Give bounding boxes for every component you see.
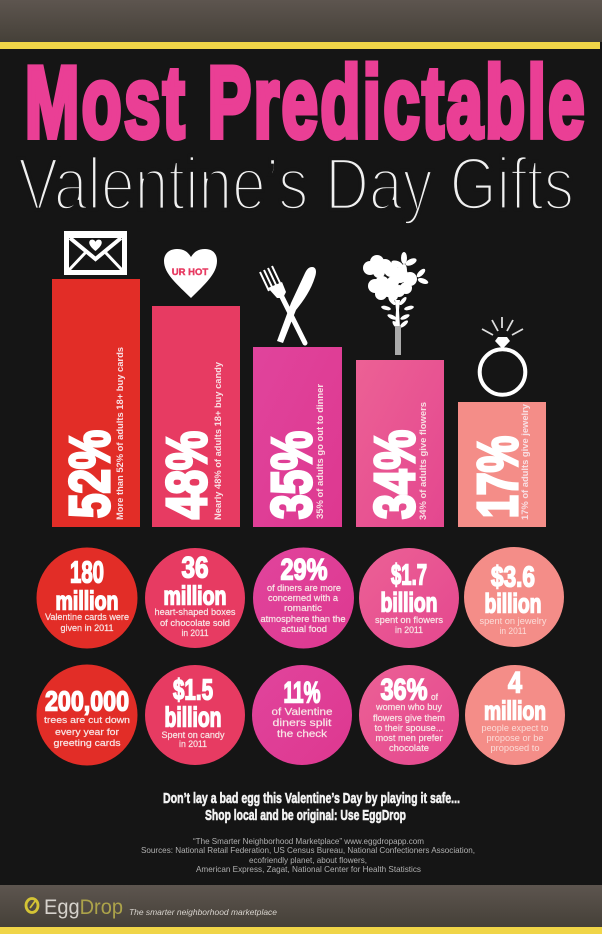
circle: 36 million: 36: [182, 552, 208, 584]
circle: 29% of diners: actual food: [281, 624, 327, 634]
call to action text: Don’t lay a bad egg this Valentine’s Day by playing it safe...: [163, 790, 460, 807]
circle: $3.6 billion: [464, 547, 564, 647]
bar: candy 48%: Nearly 48% of adults 18+ buy candy: [213, 361, 224, 520]
sources text: [141, 836, 475, 874]
circle: $1.7 billion: spent on flowers: [375, 615, 444, 625]
circle: 36% of women: of: [431, 692, 438, 702]
icon: fork and knife: [260, 266, 316, 343]
circle: 36% of women: most men prefer: [376, 733, 442, 743]
bar: candy 48%: [152, 306, 240, 527]
circle: 180 million: given in 2011: [60, 623, 114, 633]
circle: 200,000 trees: every year for: [55, 727, 119, 737]
bar: jewelry 17%: 17% of adults give jewelry: [520, 403, 531, 520]
icon: heart with UR HOT: UR HOT: [172, 267, 208, 278]
circle: 11% split the check: the check: [277, 728, 328, 740]
bar: cards 52%: [52, 279, 140, 527]
bar: jewelry 17%: [458, 402, 546, 527]
bar: flowers 34%: [356, 360, 444, 527]
bar: flowers 34%: 34% of adults give flowers: [418, 402, 429, 520]
circle: $1.5 billion: $1.5: [173, 674, 213, 706]
circle: $1.5 billion: in 2011: [179, 739, 207, 749]
circle: $3.6 billion: billion: [484, 588, 542, 618]
circle: 200,000 trees: 200,000: [45, 686, 129, 716]
sources text: American Express, Zagat, National Center for Health Statistics: [196, 864, 421, 874]
bar: jewelry 17%: 17%: [466, 436, 530, 518]
circle: 29% of diners: concerned with a: [268, 593, 338, 603]
circle: 11% split the check: [252, 665, 352, 765]
circle: 36% of women: [359, 665, 459, 765]
icon: EggDrop logo mark: [26, 898, 38, 912]
circle: 29% of diners: atmosphere than the: [260, 614, 346, 624]
bar: cards 52%: More than 52% of adults 18+ buy cards: [115, 347, 126, 520]
bar: dinner 35%: 35%: [260, 431, 324, 519]
circle: 180 million: Valentine cards were: [45, 612, 129, 622]
call to action text: Shop local and be original: Use EggDrop: [205, 807, 406, 824]
circle: 11% split the check: diners split: [272, 717, 332, 729]
circle: $1.7 billion: $1.7: [391, 560, 427, 592]
circle: 11% split the check: of Valentine: [272, 706, 333, 718]
circle: $1.5 billion: Spent on candy: [162, 730, 225, 740]
panel: stat circles row 1: [36, 547, 564, 648]
circle: $3.6 billion: in 2011: [500, 626, 526, 636]
icon: flower bouquet: [363, 252, 429, 355]
circle: 180 million: 180: [70, 554, 104, 590]
circle: 4 million: people expect to: [482, 723, 548, 733]
call to action text: [163, 790, 460, 824]
circle: 36 million: million: [164, 580, 226, 610]
tagline: The smarter neighborhood marketplace: [129, 907, 277, 917]
circle: 200,000 trees: greeting cards: [54, 738, 121, 748]
circle: 4 million: [465, 665, 565, 765]
bar: cards 52%: 52%: [58, 430, 122, 518]
circle: 200,000 trees: trees are cut down: [44, 715, 130, 725]
circle: 4 million: million: [484, 696, 546, 726]
circle: 36 million: heart-shaped boxes: [154, 607, 236, 617]
circle: 36% of women: women who buy: [375, 702, 442, 712]
circle: 29% of diners: of diners are more: [267, 583, 341, 593]
circle: 4 million: proposed to: [490, 743, 540, 753]
top band: [0, 0, 602, 49]
sources text: “The Smarter Neighborhood Marketplace” www.eggdropapp.com: [193, 836, 424, 846]
circle: 36 million: [145, 548, 245, 648]
circle: $1.7 billion: in 2011: [395, 625, 423, 635]
circle: 36 million: in 2011: [182, 628, 208, 638]
circle: 36 million: of chocolate sold: [160, 618, 230, 628]
circle: $1.7 billion: billion: [380, 588, 438, 618]
circle: $1.7 billion: [359, 548, 459, 648]
circle: 4 million: 4: [508, 666, 522, 700]
footer band: [0, 885, 602, 934]
bar: candy 48%: 48%: [155, 431, 219, 519]
panel: stat circles row 2: [36, 664, 565, 766]
circle: 180 million: [36, 548, 138, 648]
circle: 36% of women: flowers give them: [373, 713, 445, 723]
circle: 29% of diners: 29%: [280, 554, 328, 586]
circle: 200,000 trees: [36, 664, 138, 766]
circle: $3.6 billion: $3.6: [491, 562, 535, 594]
sources text: ecofriendly planet, about flowers,: [249, 855, 367, 865]
circle: $1.5 billion: billion: [164, 702, 222, 732]
panel: bar chart: [52, 279, 546, 527]
sources text: Sources: National Retail Federation, US Census Bureau, National Confectioners Association,: [141, 845, 475, 855]
circle: 180 million: million: [56, 586, 118, 616]
circle: 29% of diners: romantic: [284, 603, 323, 613]
logo wordmark: EggDrop: [44, 896, 123, 919]
circle: 4 million: propose or be: [486, 733, 544, 743]
bar: dinner 35%: [253, 347, 342, 527]
bar: flowers 34%: 34%: [363, 430, 427, 519]
circle: 36% of women: 36%: [380, 674, 428, 706]
icon: envelope: [64, 231, 127, 275]
icon: diamond ring: [480, 317, 525, 395]
circle: 11% split the check: 11%: [284, 676, 320, 710]
bar: dinner 35%: 35% of adults go out to dinner: [315, 384, 326, 519]
circle: 29% of diners: [253, 548, 354, 648]
circle: 36% of women: chocolate: [389, 743, 429, 753]
circle: 36% of women: to their spouse...: [374, 723, 444, 733]
circle: $3.6 billion: spent on jewelry: [480, 616, 547, 626]
circle: $1.5 billion: [145, 665, 245, 765]
icon: heart with UR HOT: [164, 249, 217, 298]
